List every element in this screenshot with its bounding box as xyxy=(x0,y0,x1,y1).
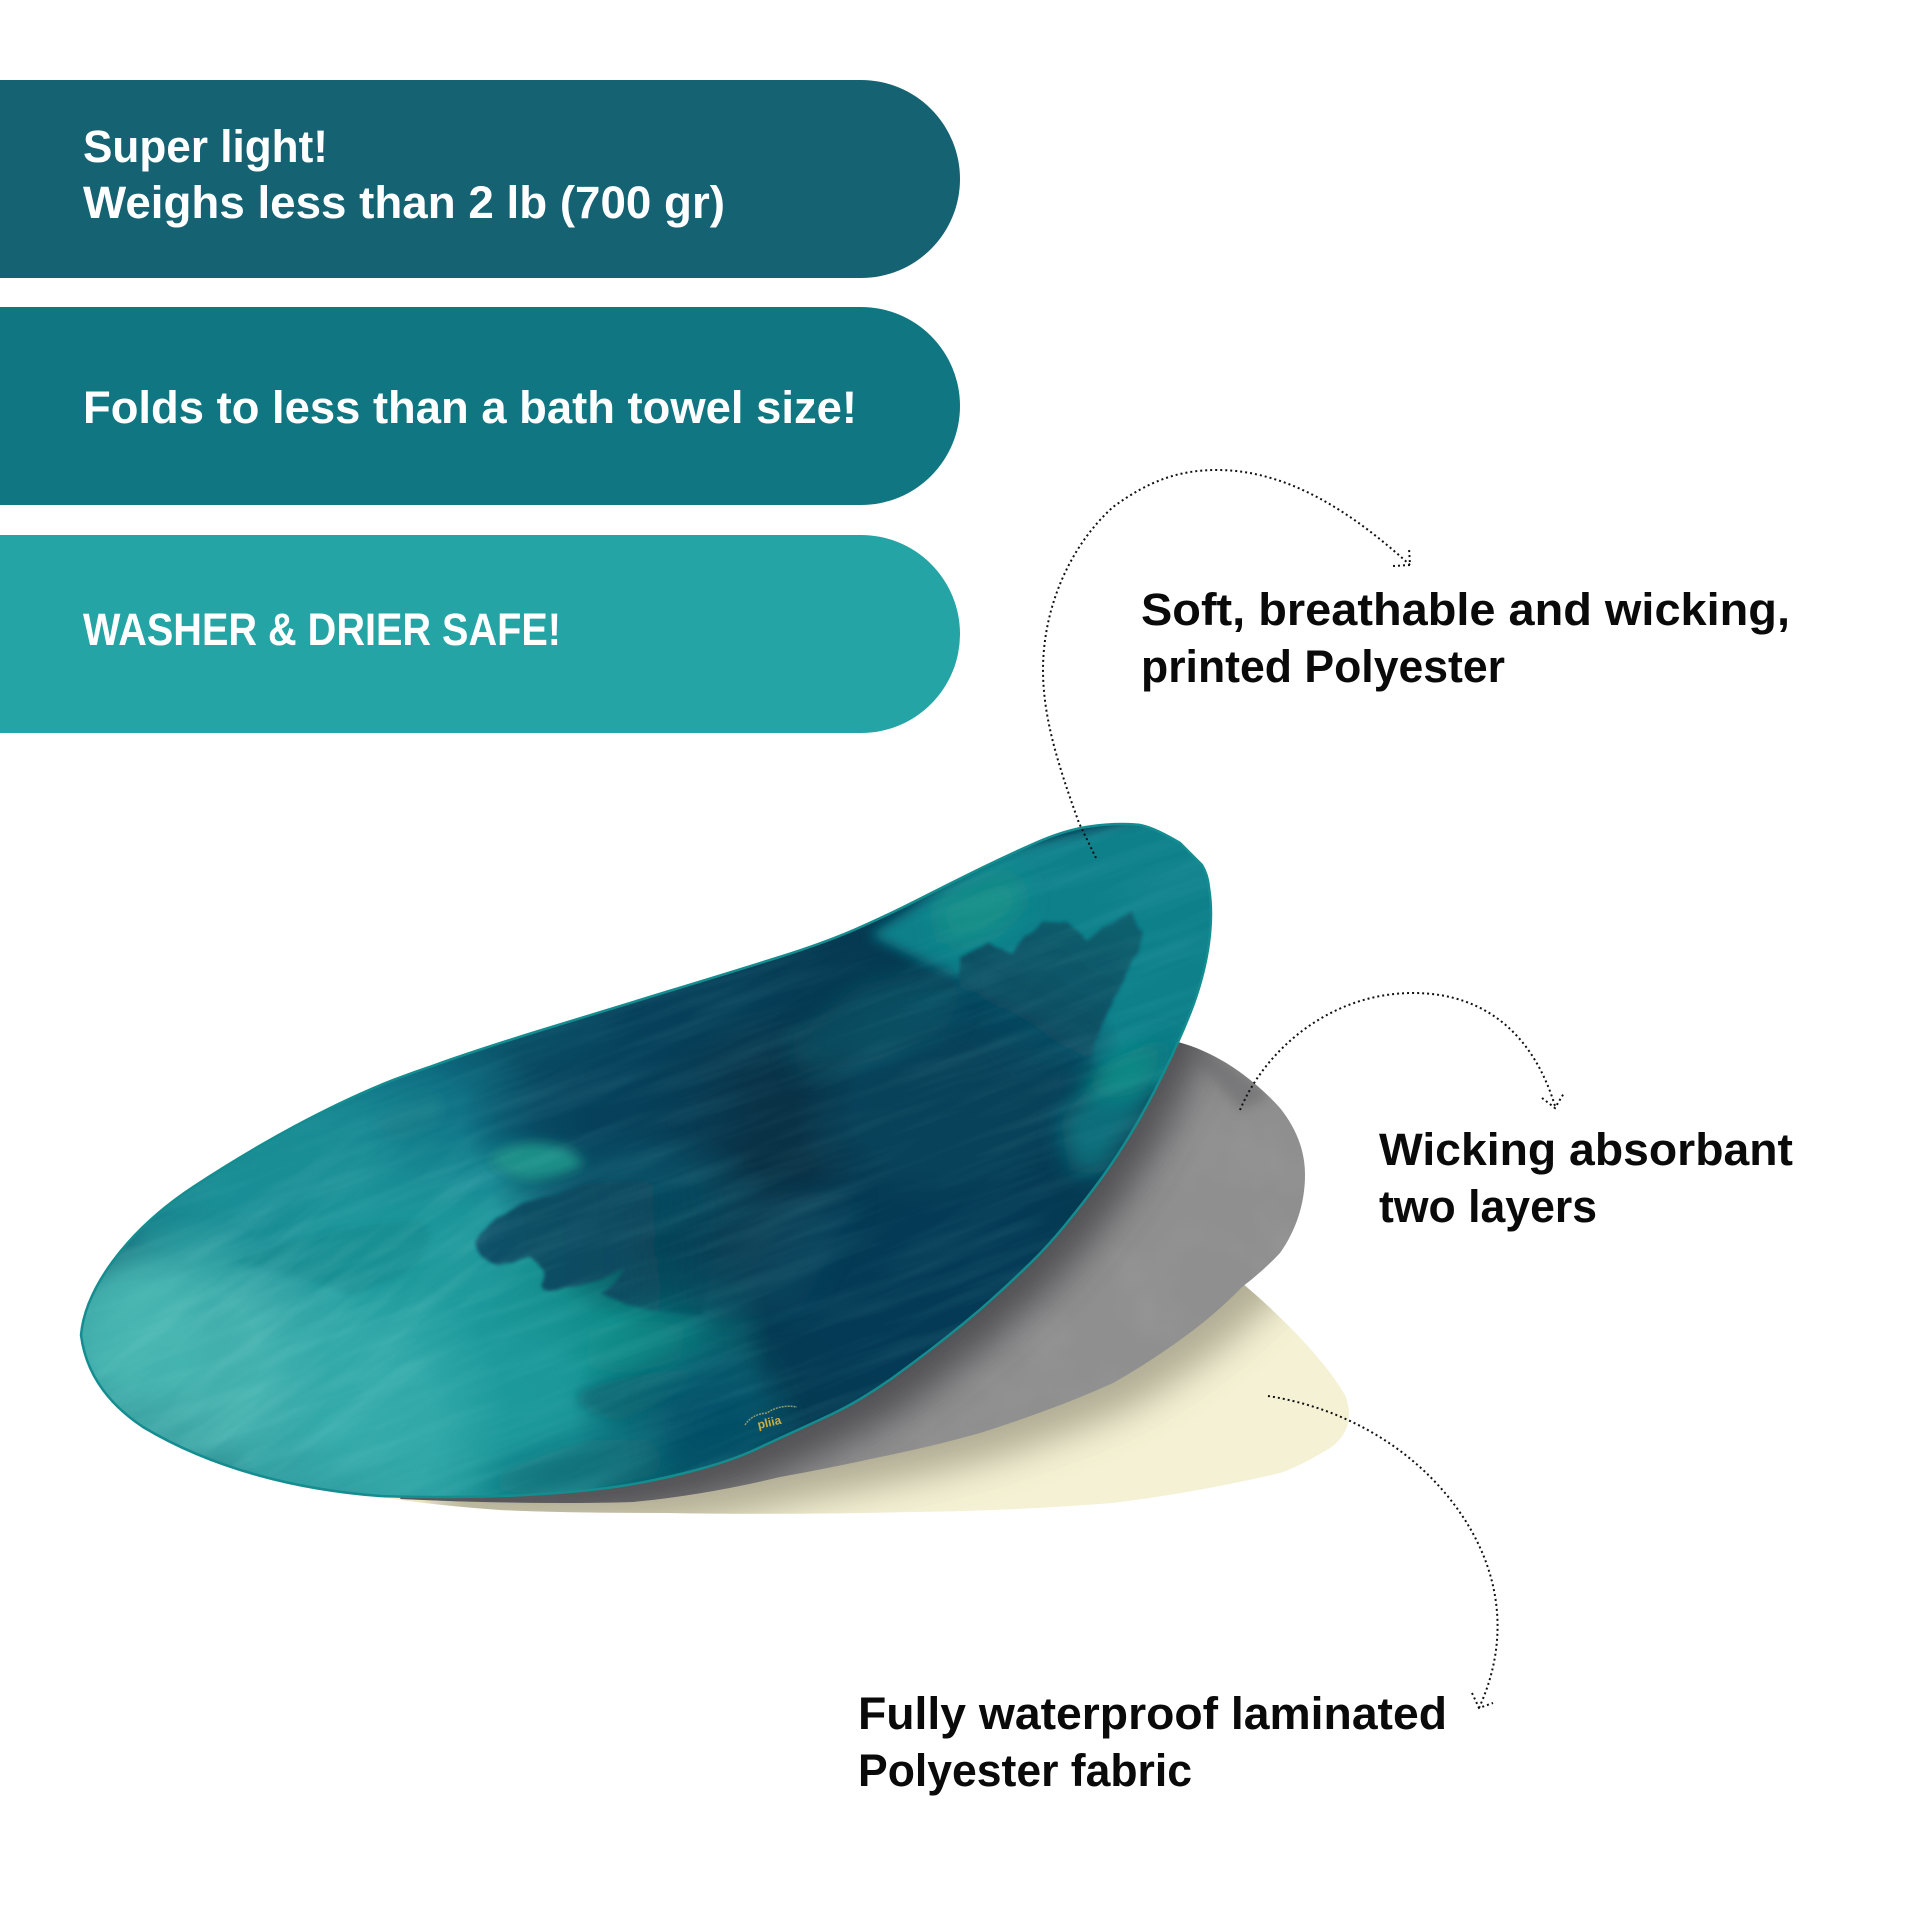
shape: navy wash lower center xyxy=(657,1190,860,1320)
shape: green patch on upper edge xyxy=(942,880,1018,939)
text: folds size: Folds to less than a bath towel size! xyxy=(83,382,857,433)
shape: dark blend above lobes xyxy=(490,1125,770,1255)
text: polyester label xyxy=(1141,584,1790,692)
shape: mid teal wash top center xyxy=(790,965,960,1075)
shape: soft colour washes xyxy=(82,1005,792,1496)
text: polyester label: printed Polyester xyxy=(1141,641,1505,692)
shape: deep center xyxy=(478,1042,828,1320)
outline: teal edge xyxy=(81,824,1211,1497)
text: super light weight: Super light! xyxy=(83,121,328,172)
pill: folds xyxy=(0,307,960,505)
shape: teal glow lower right xyxy=(1060,1040,1176,1175)
text: wicking label: two layers xyxy=(1379,1181,1597,1232)
arrow: gray layer to wicking label xyxy=(1240,993,1564,1110)
pill: washer safe xyxy=(0,535,960,733)
text: waterproof label xyxy=(858,1688,1447,1796)
text: wicking label: Wicking absorbant xyxy=(1379,1124,1793,1175)
arrow: top layer to polyester label xyxy=(1043,470,1410,858)
logo: small gold mark xyxy=(745,1406,797,1432)
layer: teal printed polyester top xyxy=(80,822,1212,1498)
texture: brush streaks xyxy=(0,461,1427,1860)
layer: gray wicking absorbent xyxy=(400,1042,1305,1503)
texture: brush streaks lower left xyxy=(21,1078,579,1582)
text: wicking label xyxy=(1379,1124,1793,1232)
arrow: cream layer to waterproof label xyxy=(1268,1396,1498,1708)
text: polyester label: Soft, breathable and wicking, xyxy=(1141,584,1790,635)
text: super light weight xyxy=(83,121,725,228)
shape: dark fingered mass xyxy=(958,911,1144,1055)
shape: upper right teal band xyxy=(868,825,1210,1088)
text: washer and drier safe: WASHER & DRIER SAFE! xyxy=(83,604,561,655)
text: waterproof label: Polyester fabric xyxy=(858,1745,1192,1796)
shape: small green patches xyxy=(488,1143,584,1180)
pill: super light xyxy=(0,80,960,278)
shape: dark soft mass under fingers xyxy=(820,1002,1114,1169)
logo: small gold mark: pliia xyxy=(756,1413,783,1432)
text: super light weight: Weighs less than 2 lb (700 gr) xyxy=(83,177,725,228)
shape: darker streak lower center xyxy=(575,1370,692,1420)
shape: dark brushed lobes xyxy=(478,1180,730,1318)
text: waterproof label: Fully waterproof laminated xyxy=(858,1688,1447,1739)
layer: cream waterproof fabric xyxy=(378,1285,1349,1514)
